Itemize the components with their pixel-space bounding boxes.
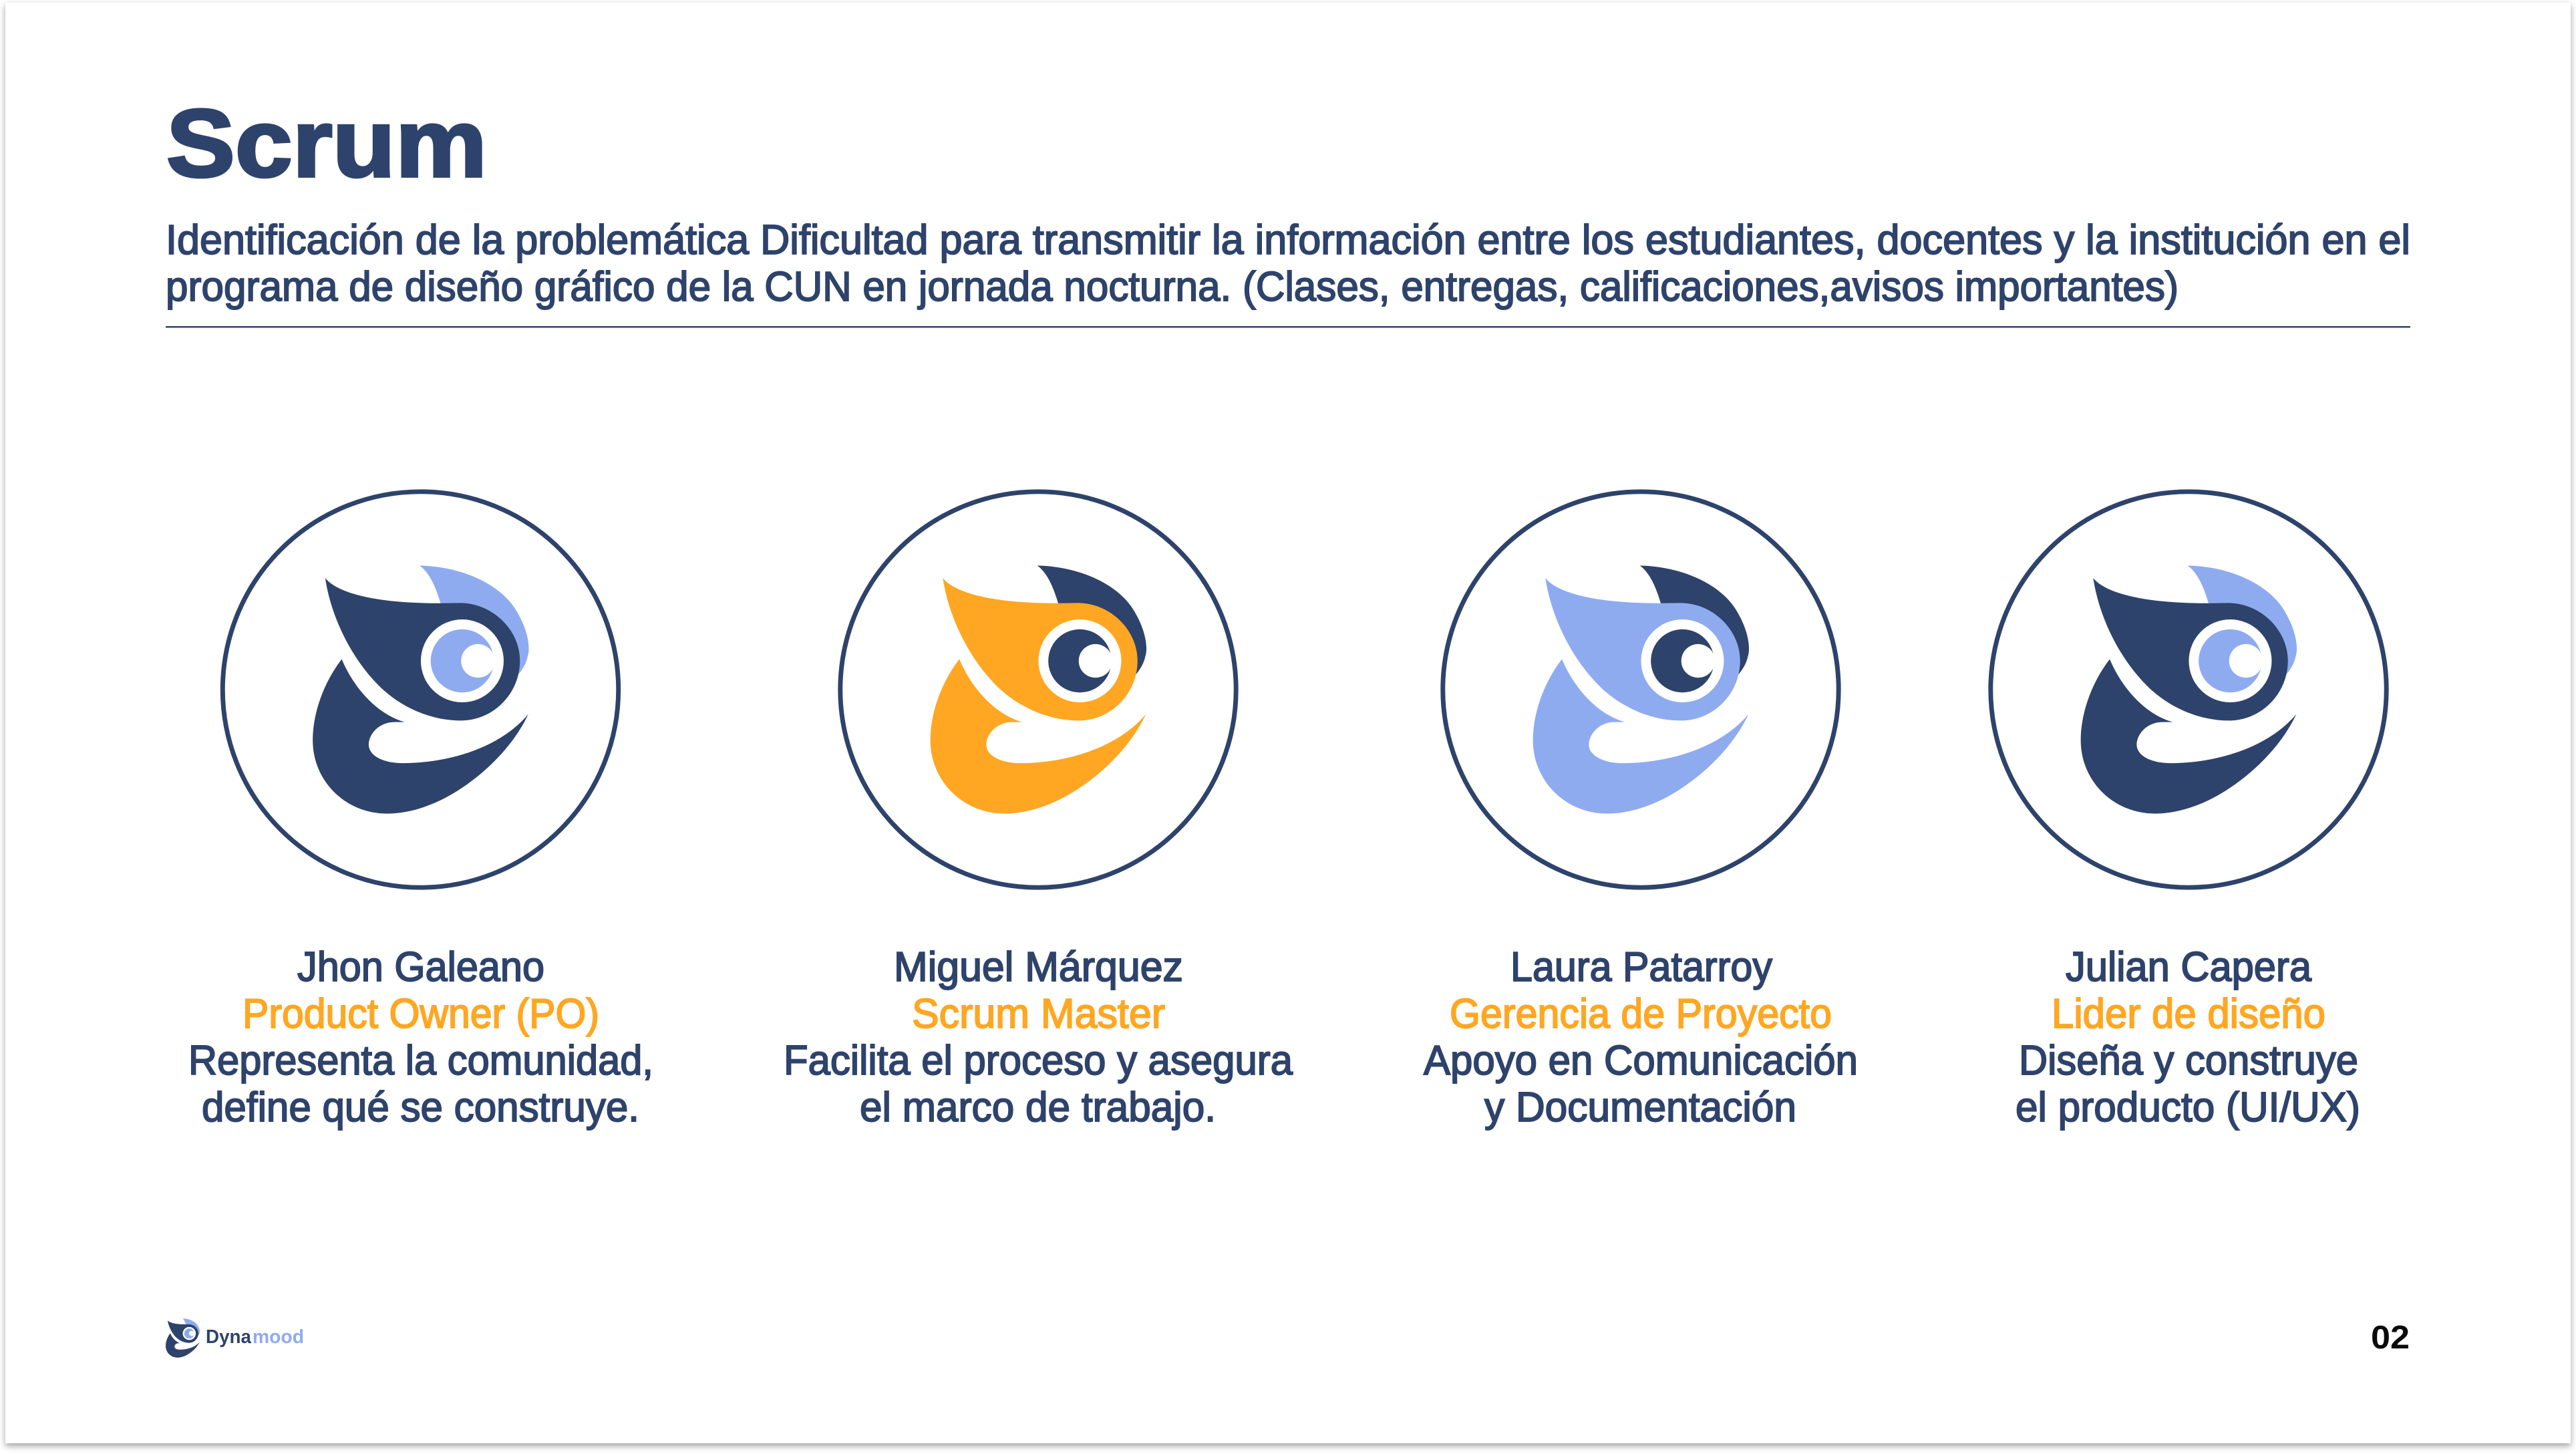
panel: Julian Capera bbox=[1991, 492, 2386, 1131]
wordmark: Dyna bbox=[206, 1326, 252, 1348]
icon: small Dynamood mark bbox=[166, 1318, 200, 1358]
icon: light blue Dynamood logo in navy circle bbox=[1443, 492, 1838, 887]
name and role text bbox=[188, 944, 653, 1131]
icon: Dynamood logo in navy circle bbox=[1991, 492, 2386, 887]
name and role text: Facilita el proceso y asegura bbox=[784, 1038, 1293, 1084]
name and role text: Apoyo en Comunicación bbox=[1424, 1038, 1858, 1084]
name and role text: Jhon Galeano bbox=[297, 944, 544, 990]
name and role text: Scrum Master bbox=[912, 991, 1165, 1037]
name and role text: el marco de trabajo. bbox=[860, 1084, 1216, 1131]
name and role text bbox=[784, 944, 1293, 1131]
title: Scrum bbox=[166, 90, 487, 197]
subtitle text block bbox=[166, 217, 2410, 310]
name and role text: Representa la comunidad, bbox=[188, 1038, 653, 1084]
name and role text: Miguel Márquez bbox=[894, 944, 1183, 990]
name and role text: Diseña y construye bbox=[2019, 1038, 2358, 1084]
icon: Dynamood logo in navy circle bbox=[222, 492, 619, 887]
name and role text: define qué se construye. bbox=[202, 1084, 639, 1131]
footer logo: Dynamood bbox=[166, 1318, 304, 1358]
name and role text: y Documentación bbox=[1484, 1084, 1796, 1131]
wordmark: mood bbox=[253, 1326, 304, 1348]
name and role text bbox=[1424, 944, 1858, 1131]
name and role text: Julian Capera bbox=[2066, 944, 2311, 990]
subtitle text block: programa de diseño gráfico de la CUN en jornada nocturna. (Clases, entregas, calificaciones,avisos importantes) bbox=[166, 264, 2179, 310]
name and role text: Product Owner (PO) bbox=[243, 991, 599, 1037]
panel: Miguel Márquez bbox=[784, 492, 1293, 1131]
name and role text: Gerencia de Proyecto bbox=[1450, 991, 1832, 1037]
name and role text bbox=[2016, 944, 2360, 1131]
panel: Jhon Galeano bbox=[188, 492, 653, 1131]
name and role text: Laura Patarroy bbox=[1510, 944, 1772, 990]
icon: orange Dynamood logo in navy circle bbox=[840, 492, 1236, 887]
subtitle text block: Identificación de la problemática Dificultad para transmitir la información entre los estudiantes, docentes y la institución en el bbox=[166, 217, 2410, 263]
panel: Laura Patarroy bbox=[1424, 492, 1858, 1131]
name and role text: Lider de diseño bbox=[2052, 991, 2325, 1037]
page number: 02 bbox=[2371, 1320, 2410, 1356]
name and role text: el producto (UI/UX) bbox=[2016, 1084, 2360, 1131]
wordmark bbox=[206, 1326, 304, 1348]
